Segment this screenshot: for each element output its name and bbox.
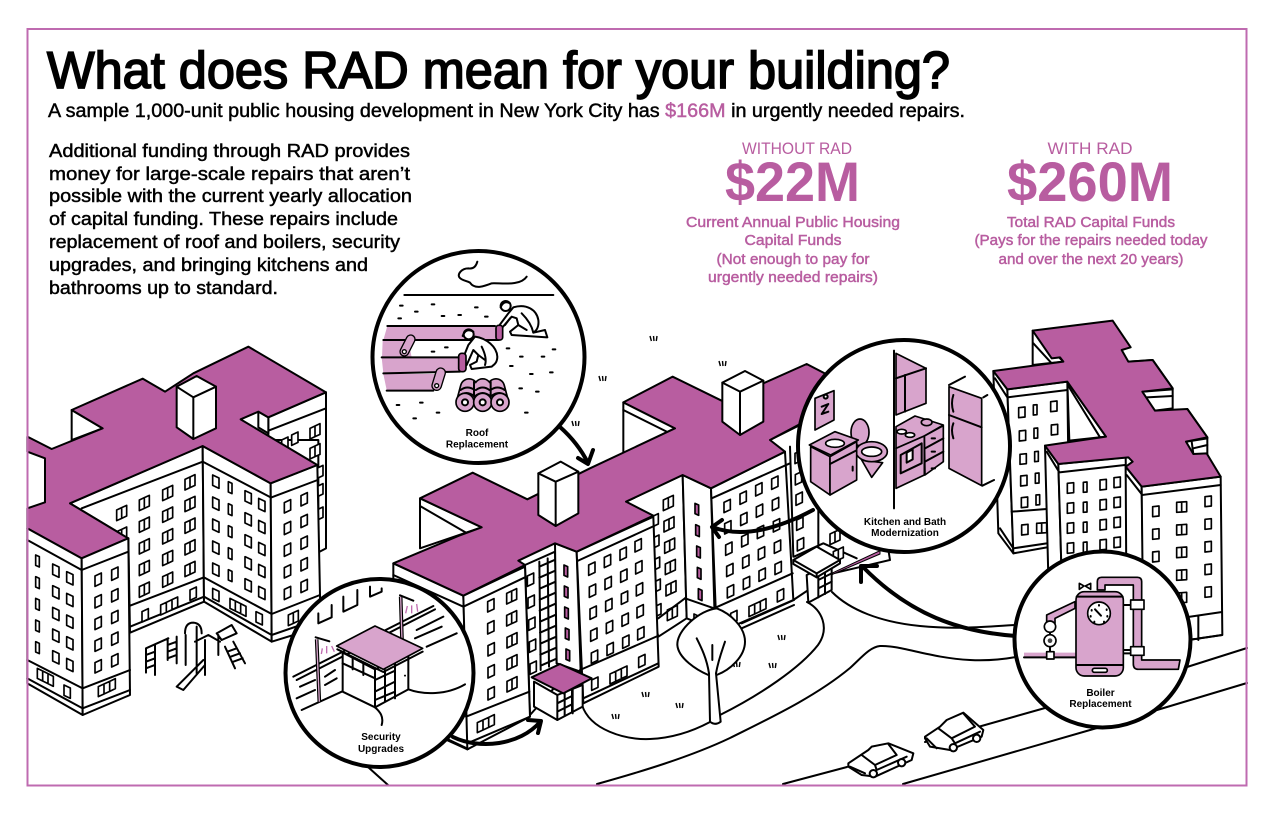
label: boiler replacement: Boiler — [1086, 688, 1115, 699]
label: security upgrades: Security — [361, 732, 401, 743]
cars on the road — [848, 713, 983, 777]
stat: without RAD: Current Annual Public Housing — [686, 215, 900, 231]
label: boiler replacement: Replacement — [1069, 699, 1132, 710]
stat: with RAD: $260M — [1007, 150, 1173, 213]
stat: without RAD: urgently needed repairs) — [708, 270, 878, 286]
arrow: kitchen and bath modernization — [712, 510, 813, 537]
bathroom mirror — [815, 391, 834, 430]
circle: roof replacement — [372, 251, 584, 463]
toilet — [851, 419, 887, 477]
circle: kitchen and bath modernization — [798, 340, 1010, 552]
stat: without RAD: Capital Funds — [744, 233, 842, 249]
stat: without RAD: WITHOUT RAD — [742, 140, 852, 158]
intro text block: Additional funding through RAD provides — [49, 141, 410, 161]
vanity — [809, 432, 858, 495]
circle: security upgrades — [286, 579, 474, 767]
stat: without RAD: (Not enough to pay for — [716, 252, 870, 268]
stat: with RAD — [974, 140, 1208, 268]
label: kitchen and bath: Modernization — [871, 528, 939, 539]
building: left — [27, 347, 326, 715]
lamp posts — [316, 595, 418, 702]
intro text block: money for large-scale repairs that aren’t — [49, 164, 410, 184]
stove and drawers — [896, 416, 943, 488]
boiler tank — [1076, 592, 1123, 676]
gauge — [1088, 602, 1110, 625]
intro text block: bathrooms up to standard. — [49, 278, 278, 298]
label: kitchen and bath: Kitchen and Bath — [864, 517, 946, 528]
stack of rolls — [456, 382, 509, 411]
arrow: security upgrades — [453, 720, 541, 744]
fridge — [949, 377, 994, 486]
worker kneeling front — [459, 329, 497, 372]
cloud — [459, 262, 527, 287]
intro text block: upgrades, and bringing kitchens and — [49, 255, 368, 275]
stat: with RAD: WITH RAD — [1048, 140, 1133, 158]
circle: boiler replacement — [1014, 552, 1190, 728]
guard booth — [337, 626, 423, 707]
upper cabinet — [896, 353, 926, 415]
label: roof replacement: Replacement — [446, 440, 509, 450]
intro text block: possible with the current yearly allocation — [49, 186, 412, 206]
intro text block: replacement of roof and boilers, security — [49, 232, 400, 252]
building: right — [993, 321, 1222, 647]
stat: with RAD: (Pays for the repairs needed today — [974, 233, 1208, 249]
stat: with RAD: Total RAD Capital Funds — [1007, 215, 1175, 231]
grass tufts — [572, 336, 785, 719]
worker kneeling back — [496, 301, 547, 340]
stat: without RAD — [686, 140, 900, 286]
illustration: ground, lawns and road — [368, 592, 1247, 785]
label: roof replacement: Roof — [466, 428, 489, 439]
arrow: roof replacement — [560, 427, 593, 464]
building: center — [393, 364, 890, 749]
tree — [677, 608, 745, 724]
stat: with RAD: and over the next 20 years) — [998, 252, 1184, 268]
pipes — [1024, 577, 1180, 669]
title: What does RAD mean for your building? — [47, 42, 950, 100]
arrow: boiler replacement — [861, 566, 1016, 636]
intro text block — [49, 141, 412, 298]
stat: without RAD: $22M — [725, 150, 860, 213]
label: security upgrades: Upgrades — [358, 744, 404, 755]
intro text block: of capital funding. These repairs include — [49, 209, 398, 229]
subtitle: A sample 1,000-unit public housing development in New York City has $166M in urgently needed repairs. — [48, 101, 965, 122]
